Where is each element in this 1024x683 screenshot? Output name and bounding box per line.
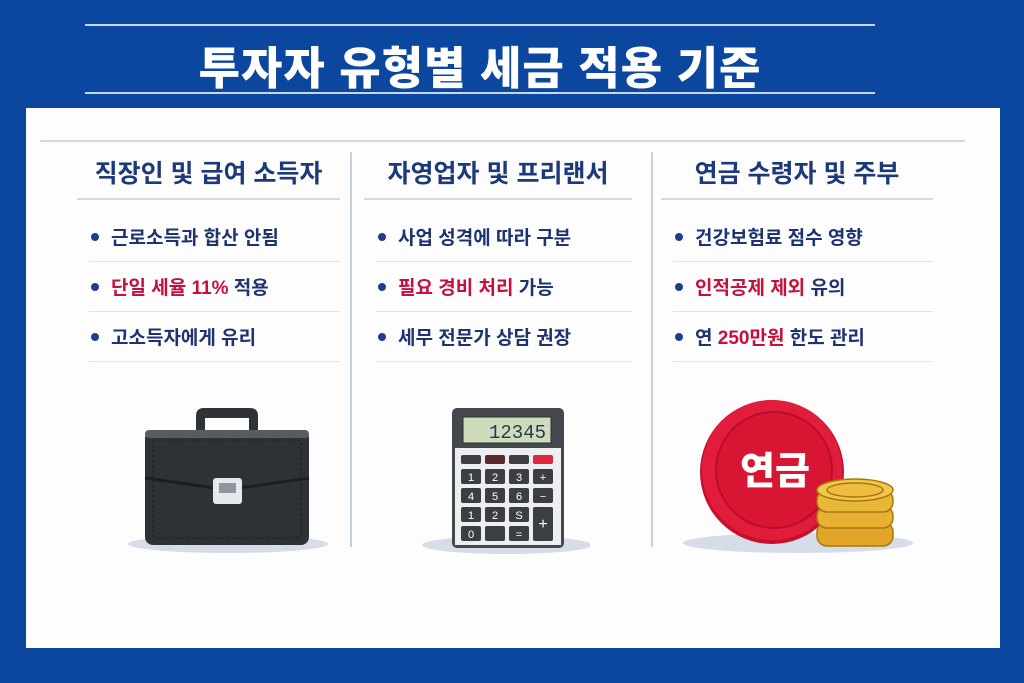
bullet list: self-employed: 세무 전문가 상담 권장	[398, 328, 571, 349]
icon: calculator: =	[516, 529, 522, 541]
bullet list: pensioners	[673, 228, 933, 362]
title: 투자자 유형별 세금 적용 기준	[199, 43, 761, 94]
icon: pension coin: 연금	[740, 451, 810, 493]
heading: salaried: 직장인 및 급여 소득자	[95, 160, 322, 188]
panel: self-employed	[364, 160, 632, 362]
heading: pensioners: 연금 수령자 및 주부	[695, 160, 899, 188]
icon: calculator: 5	[492, 491, 498, 503]
bullet list: pensioners: 연 250만원 한도 관리	[695, 328, 865, 349]
bullet list: self-employed: 필요 경비 처리 가능	[398, 278, 554, 299]
bullet list: self-employed: 사업 성격에 따라 구분	[398, 228, 571, 249]
bullet list: salaried: 단일 세율 11% 적용	[111, 278, 269, 299]
icon: calculator: −	[540, 491, 546, 503]
icon: calculator: 2	[492, 510, 498, 522]
icon: pension coin	[683, 400, 913, 553]
bullet list: salaried: 근로소득과 합산 안됨	[111, 228, 279, 249]
panel: main white	[26, 108, 1000, 648]
panel: pensioners	[661, 160, 933, 362]
icon: calculator: +	[540, 472, 546, 484]
bullet list: self-employed	[376, 228, 632, 362]
panel: salaried workers	[77, 160, 340, 362]
bullet list: pensioners: 인적공제 제외 유의	[695, 278, 845, 299]
bullet list: pensioners: 건강보험료 점수 영향	[695, 228, 863, 249]
icon: briefcase	[128, 408, 328, 553]
icon: calculator	[422, 408, 590, 554]
icon: calculator: 12345	[489, 422, 546, 444]
icon: calculator: 0	[468, 529, 474, 541]
heading: pensioners	[661, 152, 933, 200]
icon: calculator: +	[538, 516, 548, 533]
icon: calculator: 6	[516, 491, 522, 503]
icon: calculator: 4	[468, 491, 474, 503]
heading: salaried	[77, 152, 340, 200]
icon: calculator: S	[515, 510, 523, 522]
icon: calculator: 1	[468, 472, 474, 484]
icon: calculator: 3	[516, 472, 522, 484]
icon: calculator: 1	[468, 510, 474, 522]
bullet list: salaried	[89, 228, 340, 362]
heading: self-employed: 자영업자 및 프리랜서	[388, 160, 608, 188]
heading: self-employed	[364, 152, 632, 200]
icon: calculator: 2	[492, 472, 498, 484]
bullet list: salaried: 고소득자에게 유리	[111, 328, 256, 349]
